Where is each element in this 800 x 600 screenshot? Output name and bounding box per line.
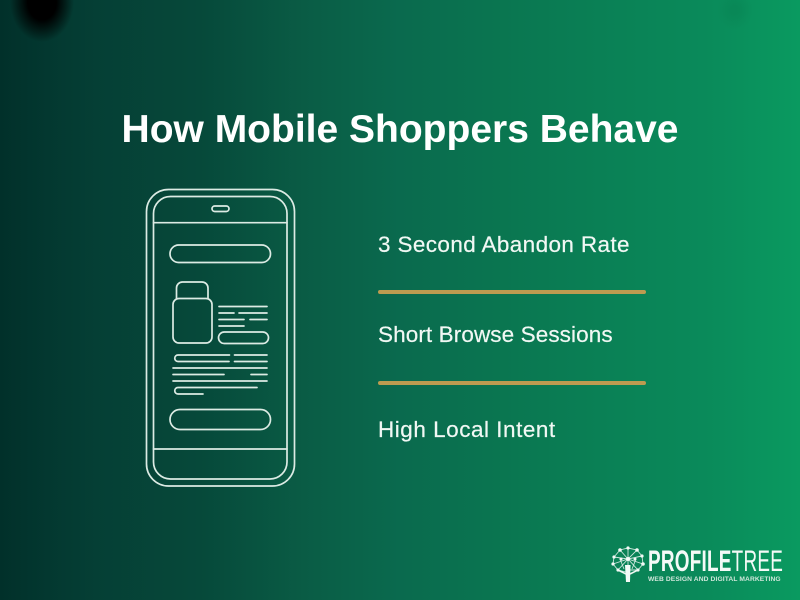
- item: high local intent: High Local Intent: [378, 417, 556, 442]
- item: short browse sessions: Short Browse Sessions: [378, 322, 613, 347]
- logo: ProfileTree: [611, 544, 783, 583]
- tagline: WEB DESIGN AND DIGITAL MARKETING: [648, 576, 781, 583]
- title: How Mobile Shoppers Behave: [122, 108, 678, 151]
- item: 3 second abandon rate: 3 Second Abandon Rate: [378, 232, 630, 257]
- faint top right spot: [710, 0, 760, 35]
- divider one: [378, 290, 646, 294]
- icon: network tree: [611, 546, 645, 582]
- wordmark: PROFILETREE: [648, 544, 783, 578]
- dark corner spot: [0, 0, 120, 60]
- divider two: [378, 381, 646, 385]
